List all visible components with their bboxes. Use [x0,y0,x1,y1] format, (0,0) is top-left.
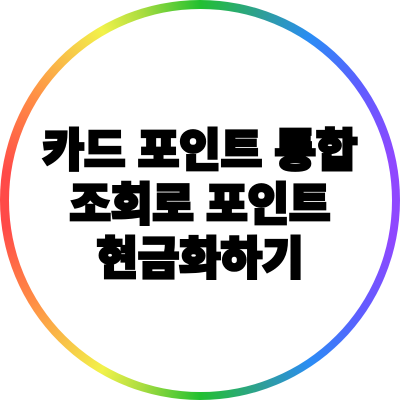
title line 3: 현금화하기 [96,233,304,284]
title line 1: 카드 포인트 통합 [43,125,357,176]
title line 2: 조회로 포인트 [70,179,330,230]
